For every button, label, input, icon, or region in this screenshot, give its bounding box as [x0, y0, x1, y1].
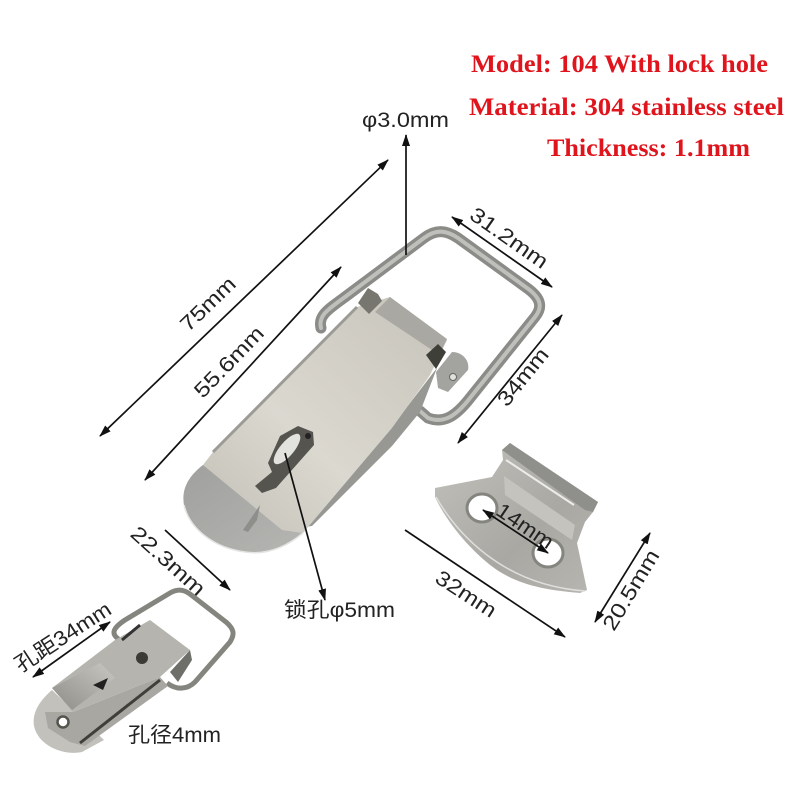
tail flap	[183, 465, 303, 553]
label: 55.6mm: 55.6mm	[190, 322, 269, 403]
dimension labels	[11, 109, 664, 747]
arrow: 20.5mm	[595, 533, 650, 622]
bracket mounting holes	[467, 494, 563, 567]
label: wire diameter: φ3.0mm	[362, 109, 449, 132]
label: 34mm: 34mm	[493, 344, 554, 411]
small plate window	[52, 663, 115, 710]
heading: specs	[469, 51, 784, 162]
small holes	[136, 652, 148, 664]
tail emboss	[243, 505, 260, 532]
label: hole diameter: 孔径4mm	[128, 724, 221, 747]
small hinge	[170, 650, 192, 682]
small tail	[34, 690, 104, 753]
plate upper dark edge	[213, 307, 357, 452]
label: 75mm: 75mm	[176, 272, 241, 336]
small latch photo	[34, 590, 233, 753]
arrow: 55.6mm	[145, 267, 341, 480]
arrow: 75mm	[100, 160, 388, 436]
latch plate body	[183, 297, 447, 553]
left hinge knuckle	[358, 288, 382, 314]
side fold	[298, 368, 437, 528]
thickness text: Thickness: 1.1mm	[547, 135, 750, 162]
wire ring	[320, 232, 540, 420]
small body	[45, 677, 168, 746]
label: 14mm: 14mm	[492, 499, 558, 554]
label: 31.2mm: 31.2mm	[465, 203, 552, 274]
bracket fold shading	[504, 476, 575, 540]
material text: Material: 304 stainless steel	[469, 94, 784, 121]
arrow: 3.0mm wire	[405, 135, 407, 255]
bracket top flange	[502, 443, 598, 512]
label: lock hole: 锁孔φ5mm	[284, 599, 395, 622]
small ring	[114, 590, 233, 688]
arrow: 14mm	[483, 510, 548, 553]
right hinge	[426, 344, 468, 392]
model text: Model: 104 With lock hole	[471, 51, 768, 78]
bracket	[435, 443, 598, 593]
main latch	[183, 232, 540, 553]
arrow: 32mm	[405, 530, 565, 637]
label: 22.3mm: 22.3mm	[126, 522, 210, 601]
label: 32mm: 32mm	[431, 566, 501, 623]
lock hole hasp	[255, 426, 314, 493]
small dark edge	[80, 680, 160, 743]
raised top tab	[375, 297, 447, 351]
arrow: 31.2mm	[452, 217, 552, 287]
arrow: lock hole	[285, 453, 325, 600]
arrow: 22.3mm	[165, 530, 230, 590]
arrow: hole spacing	[33, 622, 110, 677]
small plate	[52, 620, 190, 712]
arrow: 34mm	[458, 315, 562, 443]
label: hole spacing: 孔距34mm	[11, 598, 116, 677]
dimension lines	[33, 135, 650, 677]
label: 20.5mm: 20.5mm	[598, 546, 664, 635]
